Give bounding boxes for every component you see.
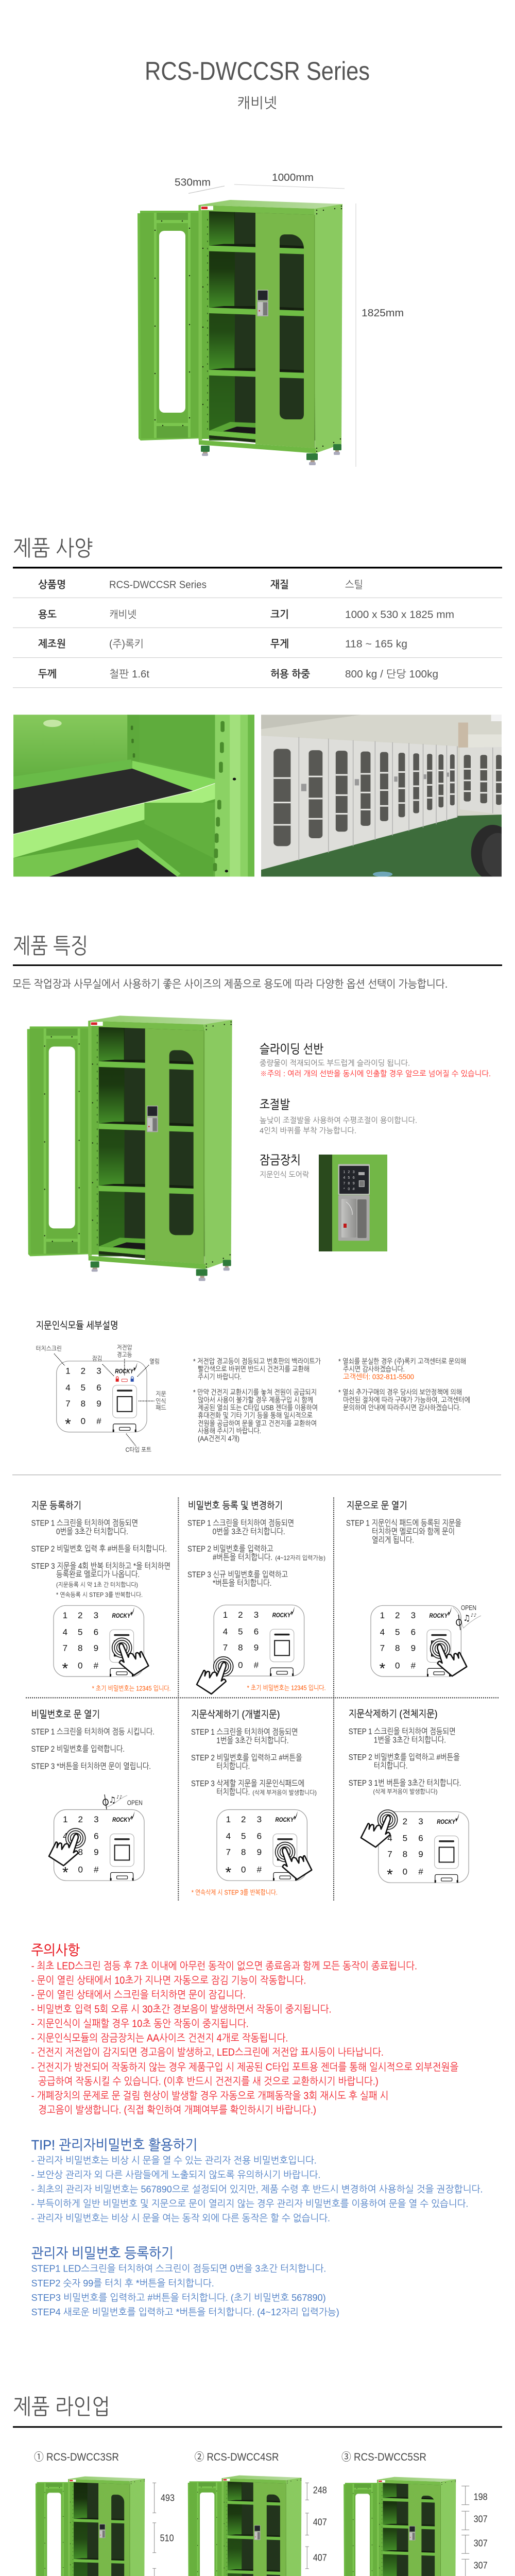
- diagram: fingerprint module: 잠김: [92, 1355, 102, 1362]
- step panel: delete all fingerprints: 1번을 3초간 터치합니다.: [374, 1736, 446, 1745]
- feature: sliding shelf: 슬라이딩 선반: [260, 1042, 323, 1056]
- cautions: 공급하여 작동시킬 수 있습니다. (이후 반드시 건전지를 새 것으로 교환하시기 바랍니다.): [38, 2076, 379, 2087]
- shelf dimensions: 307: [474, 2538, 488, 2548]
- icon: hand touching key: [49, 1828, 85, 1866]
- icon: melody notes with OPEN: OPEN: [461, 1604, 476, 1612]
- keypad: *: [65, 1416, 71, 1433]
- step panel: delete single fingerprint: STEP 1 스크린을 터치하여 점등되면: [191, 1727, 298, 1737]
- keypad: [217, 1809, 307, 1882]
- spec table: 철판 1.6t: [109, 669, 149, 680]
- step panel: register fingerprint: 등록완료 멜로디가 나옵니다.: [56, 1570, 140, 1579]
- feature: lock: [260, 1154, 387, 1251]
- step panel: delete all fingerprints: STEP 1 스크린을 터치하여 점등되면: [349, 1727, 456, 1736]
- keypad: 123: [65, 1366, 101, 1376]
- step panel: delete single fingerprint: STEP 3 삭제할 지문을 지문인식패드에: [191, 1779, 304, 1788]
- icon: hand touching pad: [276, 1842, 312, 1879]
- cautions: 경고음이 발생합니다. (직접 확인하여 개폐여부를 확인하시기 바랍니다.): [38, 2105, 316, 2116]
- step panel: register fingerprint: * 초기 비밀번호는 12345 입니다.: [92, 1685, 171, 1692]
- step panel: delete all fingerprints: STEP 3 1번 버튼을 3초간 터치합니다.: [349, 1778, 461, 1788]
- photo: cabinets installed in a room: [261, 715, 502, 877]
- keypad: 789: [223, 1642, 259, 1652]
- depth dimension: 530mm: [175, 177, 211, 189]
- notes: battery: 제공된 열쇠 또는 C타입 USB 젠더를 이용하여: [198, 1403, 318, 1412]
- diagram: fingerprint module: 지문: [156, 1391, 166, 1398]
- icon: hand touching pad: [112, 1638, 148, 1675]
- step panel: delete single fingerprint: STEP 2 비밀번호를 입력하고 #버튼을: [191, 1753, 302, 1762]
- spec table: 캐비넷: [109, 609, 136, 620]
- keypad: 456: [223, 1626, 259, 1636]
- diagram: fingerprint module: 패드: [156, 1404, 166, 1412]
- step panel: delete all fingerprints: [349, 1709, 469, 1884]
- step panel: register fingerprint: (지문등록 시 약 1초 간 터치합니다): [56, 1581, 138, 1588]
- step panel: delete single fingerprint: 터치합니다.: [216, 1788, 250, 1797]
- keypad: [54, 1605, 144, 1677]
- step panel: register password: *버튼을 터치합니다.: [213, 1579, 271, 1588]
- step panel: delete all fingerprints: STEP 2 비밀번호를 입력하고 #버튼을: [349, 1753, 460, 1762]
- feature: sliding shelf: 중량물이 적재되어도 부드럽게 슬라이딩 됩니다.: [260, 1059, 410, 1067]
- step panel: open with password: STEP 1 스크린을 터치하여 점등 시킵니다.: [31, 1727, 154, 1736]
- lock close-up image: 789: [343, 1182, 355, 1185]
- keypad: [214, 1605, 304, 1676]
- diagram: fingerprint module: [36, 1344, 166, 1453]
- spec table: [13, 579, 502, 688]
- tip: admin password: - 최초의 관리자 비밀번호는 567890으로 설정되어 있지만, 제품 수령 후 반드시 변경하여 사용하실 것을 권장합니다.: [31, 2184, 483, 2195]
- cautions: - 문이 열린 상태에서 10초가 지나면 자동으로 잠김 기능이 작동합니다.: [31, 1975, 306, 1986]
- feature: lock: 잠금장치: [260, 1154, 301, 1167]
- icon: melody notes with OPEN: ♫: [109, 1795, 116, 1805]
- keypad: ROCKY: [275, 1816, 294, 1823]
- notes: battery: 주시기 바랍니다.: [198, 1372, 242, 1381]
- section heading: product features: 제품 특징: [13, 934, 88, 958]
- icon: hand touching key 1: [361, 1810, 398, 1847]
- keypad: 123: [387, 1817, 423, 1826]
- keypad: [54, 1809, 144, 1882]
- step panel: delete single fingerprint: (삭제 부저음이 발생합니다): [252, 1789, 317, 1796]
- cautions: - 건전지 저전압이 감지되면 경고음이 발생하고, LED스크린에 저전압 표시등이 나타납니다.: [31, 2047, 384, 2058]
- notes: keys: 마련된 절차에 따라 구매가 가능하여, 고객센터에: [343, 1396, 470, 1404]
- keypad: 789: [226, 1848, 262, 1857]
- shelf dimensions: 407: [313, 2552, 327, 2563]
- step panel: register password: 비밀번호 등록 및 변경하기: [188, 1501, 283, 1512]
- cautions: - 비밀번호 입력 5회 오류 시 30초간 경보음이 발생하면서 작동이 중지됩니다.: [31, 2004, 332, 2015]
- keypad: 0#: [78, 1865, 99, 1874]
- feature: adjustable foot: 조절발: [260, 1098, 290, 1112]
- cautions: - 지문인식이 실패할 경우 10초 동안 작동이 중지됩니다.: [31, 2018, 249, 2029]
- step panel: register fingerprint: [31, 1501, 171, 1692]
- lock close-up image: [319, 1155, 387, 1251]
- cautions: [31, 1943, 458, 2116]
- admin password registration steps: [31, 2246, 339, 2317]
- keypad: 0#: [241, 1865, 262, 1874]
- keypad: 0#: [238, 1660, 259, 1670]
- spec table: (주)록키: [109, 639, 144, 650]
- lineup: RCS-DWCC4SR: [188, 2451, 327, 2576]
- tip: admin password: - 관리자 비밀번호는 비상 시 문을 열 수 있는 관리자 전용 비밀번호입니다.: [31, 2155, 317, 2166]
- notes: battery: 전원을 공급하여 문을 열고 건전지를 교환하여: [198, 1419, 317, 1427]
- diagram: fingerprint module: 열림: [149, 1358, 160, 1365]
- feature: sliding shelf: ※주의 : 여러 개의 선반을 동시에 인출할 경우 앞으로 넘어질 수 있습니다.: [260, 1070, 491, 1078]
- shelf dimensions: 307: [474, 2561, 488, 2571]
- step panel: register password: 0번을 3초간 터치합니다.: [213, 1527, 285, 1536]
- tip: admin password: TIP! 관리자비밀번호 활용하기: [31, 2137, 197, 2153]
- step panel: delete single fingerprint: 터치합니다.: [216, 1762, 250, 1771]
- keypad: 789: [63, 1848, 99, 1857]
- notes: battery: 휴대전화 및 기타 기기 등을 통해 일시적으로: [198, 1411, 313, 1419]
- diagram: fingerprint module: C타입 포트: [126, 1446, 151, 1453]
- keypad: [379, 1811, 469, 1884]
- step panel: delete single fingerprint: [191, 1709, 317, 1896]
- icon: melody notes with OPEN: ♪♪: [116, 1795, 123, 1800]
- title: [145, 57, 370, 111]
- keypad: 123: [226, 1815, 262, 1824]
- shelf dimensions: 198: [474, 2492, 488, 2502]
- icon: melody notes with OPEN: OPEN: [127, 1799, 143, 1807]
- spec table: 제조원: [38, 639, 66, 650]
- heading: fingerprint module details: 지문인식모듈 세부설명: [36, 1320, 118, 1331]
- step panel: register fingerprint: STEP 1 스크린을 터치하여 점등되면: [31, 1519, 138, 1528]
- notes: keys: 문의하여 안내에 따라주시면 감사하겠습니다.: [343, 1403, 461, 1412]
- step panel: delete single fingerprint: * 연속삭제 시 STEP 3를 반복합니다.: [192, 1889, 278, 1896]
- keypad: 0#: [395, 1660, 416, 1670]
- notes: keys: 주시면 감사하겠습니다.: [343, 1365, 405, 1373]
- tip: admin password: - 보안상 관리자 외 다른 사람들에게 노출되지 않도록 유의하시기 바랍니다.: [31, 2170, 320, 2180]
- lineup: RCS-DWCC5SR: [341, 2451, 488, 2576]
- step panel: delete single fingerprint: 지문삭제하기 (개별지문): [191, 1709, 280, 1720]
- keypad: 456: [387, 1833, 423, 1843]
- shelf dimensions: 307: [474, 2514, 488, 2524]
- width dimension: 1000mm: [272, 172, 314, 183]
- keypad: ROCKY: [112, 1816, 131, 1823]
- step panel: open with fingerprint: 지문으로 문 열기: [347, 1501, 407, 1512]
- step panel: register password: STEP 1 스크린을 터치하여 점등되면: [187, 1519, 294, 1528]
- notes: keys: * 열쇠 추가구매의 경우 당사의 보안정책에 의해: [338, 1388, 462, 1396]
- step panel: register fingerprint: 지문 등록하기: [31, 1501, 81, 1512]
- notes: battery: 않아서 사용이 불가할 경우 제품구입 시 함께: [198, 1396, 313, 1404]
- step panel: register fingerprint: STEP 2 비밀번호 입력 후 #버튼을 터치합니다.: [31, 1545, 167, 1554]
- keypad: ROCKY: [437, 1818, 456, 1825]
- diagram: fingerprint module: 경고등: [117, 1351, 132, 1359]
- diagram: fingerprint module: 저전압: [117, 1344, 132, 1351]
- keypad: 0#: [403, 1867, 423, 1876]
- lineup: RCS-DWCC3SR: ① RCS-DWCC3SR: [34, 2451, 119, 2463]
- keypad: [57, 1361, 147, 1433]
- photo: shelf close-up: [13, 715, 254, 877]
- admin password registration steps: 관리자 비밀번호 등록하기: [31, 2246, 174, 2261]
- admin password registration steps: STEP2 숫자 99를 터치 후 *버튼을 터치합니다.: [31, 2278, 214, 2289]
- admin password registration steps: STEP1 LED스크린을 터치하여 스크린이 점등되면 0번을 3초간 터치합니다.: [31, 2263, 326, 2274]
- step panel: register password: * 초기 비밀번호는 12345 입니다.: [247, 1684, 326, 1692]
- keypad: 789: [387, 1850, 423, 1859]
- cabinet: [187, 2475, 302, 2576]
- step panel: open with fingerprint: 열리게 됩니다.: [372, 1535, 414, 1545]
- keypad: ROCKY: [430, 1612, 448, 1619]
- spec table: 스틸: [345, 579, 363, 590]
- admin password registration steps: STEP3 비밀번호를 입력하고 #버튼을 터치합니다. (초기 비밀번호 567890): [31, 2292, 326, 2303]
- notes: battery: * 만약 건전지 교환시기를 놓쳐 전원이 공급되지: [193, 1388, 317, 1396]
- keypad: 456: [65, 1383, 101, 1393]
- step panel: register fingerprint: STEP 3 지문을 4회 반복 터치하고 *을 터치하면: [31, 1562, 170, 1571]
- lineup: RCS-DWCC5SR: ③ RCS-DWCC5SR: [341, 2451, 426, 2463]
- step panel: delete single fingerprint: 1번을 3초간 터치합니다.: [216, 1736, 289, 1745]
- shelf dimensions: [305, 2483, 327, 2576]
- cabinet: [344, 2477, 456, 2576]
- spec table: 재질: [270, 579, 289, 590]
- step panel: open with fingerprint: 터치하면 멜로디와 함께 문이: [372, 1527, 455, 1536]
- step panel: register password: STEP 3 신규 비밀번호를 입력하고: [187, 1570, 288, 1580]
- keypad: *: [222, 1659, 229, 1676]
- spec table: 무게: [270, 639, 289, 650]
- step panel: open with password: [31, 1709, 154, 1882]
- step panel: open with fingerprint: STEP 1 지문인식 패드에 등록된 지문을: [346, 1519, 461, 1528]
- spec table: 용도: [38, 609, 57, 620]
- section heading: product spec: [13, 536, 502, 569]
- keypad: 456: [380, 1627, 416, 1637]
- notes: battery: 사용해 주시기 바랍니다.: [198, 1427, 261, 1435]
- step panel: open with password: STEP 2 비밀번호를 입력합니다.: [31, 1744, 125, 1754]
- diagram: fingerprint module: 인식: [156, 1397, 166, 1404]
- cautions: - 지문인식모듈의 잠금장치는 AA사이즈 건전지 4개로 작동됩니다.: [31, 2033, 288, 2044]
- cabinet: [35, 2476, 145, 2576]
- spec table: 크기: [270, 609, 289, 620]
- tip: admin password: - 관리자 비밀번호는 비상 시 문을 여는 동작 외에 다른 동작은 할 수 없습니다.: [31, 2213, 330, 2224]
- shelf dimensions: 248: [313, 2485, 327, 2496]
- feature: sliding shelf: [260, 1042, 491, 1078]
- subtitle: 캐비넷: [237, 95, 277, 111]
- spec table: 두께: [38, 669, 57, 680]
- keypad: *: [62, 1660, 68, 1677]
- lineup: RCS-DWCC3SR: [34, 2451, 175, 2576]
- spec table: 허용 하중: [270, 669, 310, 680]
- title: RCS-DWCCSR Series: [145, 57, 370, 86]
- icon: melody notes with OPEN: ♪♪: [471, 1613, 477, 1618]
- step panel: delete all fingerprints: 지문삭제하기 (전체지문): [349, 1709, 438, 1720]
- lock close-up image: *0#: [344, 1188, 355, 1191]
- step panel: register password: #버튼을 터치합니다.: [213, 1553, 272, 1562]
- depth dimension: [175, 177, 225, 193]
- feature: adjustable foot: 높낮이 조절발을 사용하여 수평조절이 용이합니다.: [260, 1116, 417, 1125]
- cautions: 주의사항: [31, 1943, 80, 1958]
- spec table: 118 ~ 165 kg: [345, 639, 407, 650]
- feature: lock: 지문인식 도어락: [260, 1171, 310, 1179]
- shelf dimensions: 510: [160, 2533, 174, 2544]
- step panel: register password: STEP 2 비밀번호를 입력하고: [187, 1545, 273, 1554]
- keypad: 123: [63, 1611, 98, 1620]
- feature: adjustable foot: [260, 1098, 417, 1136]
- step panel: register fingerprint: * 연속등록 시 STEP 3를 반복합니다.: [56, 1591, 143, 1598]
- keypad: *: [387, 1866, 393, 1884]
- feature cabinet illustration: [27, 1015, 232, 1281]
- keypad: [371, 1605, 461, 1677]
- section heading: product spec: 제품 사양: [13, 536, 93, 561]
- intro sentence: 모든 작업장과 사무실에서 사용하기 좋은 사이즈의 제품으로 용도에 따라 다양한 옵션 선택이 가능합니다.: [12, 978, 448, 990]
- keypad: *: [379, 1660, 385, 1677]
- keypad: 456: [63, 1627, 98, 1637]
- admin password registration steps: STEP4 새로운 비밀번호를 입력하고 *버튼을 터치합니다. (4~12자리 입력가능): [31, 2307, 339, 2317]
- keypad: ROCKY: [272, 1612, 291, 1619]
- keypad: ROCKY: [115, 1367, 134, 1375]
- notes: battery: 빨간색으로 바뀌면 반드시 건전지를 교환해: [198, 1365, 310, 1373]
- width dimension: [234, 172, 345, 189]
- notes: keys: * 열쇠를 분실한 경우 (주)록키 고객센터로 문의해: [338, 1357, 466, 1365]
- diagram: fingerprint module: 터치스크린: [36, 1345, 62, 1352]
- step panel: delete all fingerprints: 터치합니다.: [374, 1761, 408, 1771]
- icon: hand touching pad: [431, 1639, 467, 1676]
- tip: admin password: [31, 2137, 483, 2224]
- keypad: 0#: [81, 1416, 101, 1426]
- keypad: 123: [223, 1610, 259, 1620]
- keypad: *: [62, 1864, 68, 1882]
- cautions: - 문이 열린 상태에서 스크린을 터치하면 문이 잠깁니다.: [31, 1990, 246, 2001]
- cautions: - 개폐장치의 문제로 문 걸림 현상이 발생할 경우 자동으로 개폐동작을 3회 재시도 후 실패 시: [31, 2091, 389, 2102]
- step panel: delete all fingerprints: (삭제 부저음이 발생합니다): [373, 1788, 438, 1795]
- feature: adjustable foot: 4인치 바퀴를 부착 가능합니다.: [260, 1126, 356, 1136]
- hero cabinet with dimensions: [138, 172, 404, 467]
- step panel: register password: [187, 1501, 326, 1694]
- cautions: - 최초 LED스크린 점등 후 7초 이내에 아무런 동작이 없으면 종료음과 함께 모든 동작이 종료됩니다.: [31, 1960, 417, 1972]
- keypad: 789: [63, 1643, 98, 1653]
- lock close-up image: 123: [343, 1171, 355, 1174]
- shelf dimensions: 407: [313, 2517, 327, 2528]
- section heading: product lineup: 제품 라인업: [13, 2395, 110, 2419]
- spec table: RCS-DWCCSR Series: [109, 579, 207, 590]
- keypad: 456: [226, 1831, 262, 1841]
- keypad: 123: [63, 1815, 99, 1824]
- notes: battery: (AA건전지 4개): [198, 1434, 239, 1443]
- section heading: product features: [13, 934, 502, 966]
- step panel: register fingerprint: 0번을 3초간 터치합니다.: [56, 1527, 128, 1536]
- step panel: register password: (4~12자리 입력가능): [275, 1554, 325, 1562]
- spec table: 800 kg / 단당 100kg: [345, 669, 438, 680]
- keypad: 456: [63, 1831, 99, 1841]
- icon: melody notes with OPEN: [103, 1794, 143, 1809]
- shelf dimensions: [461, 2486, 488, 2576]
- spec table: 1000 x 530 x 1825 mm: [345, 609, 454, 620]
- shelf dimensions: [152, 2483, 175, 2576]
- lineup: RCS-DWCC4SR: ② RCS-DWCC4SR: [195, 2451, 279, 2463]
- keypad: ROCKY: [112, 1612, 131, 1619]
- notes: battery: [193, 1357, 321, 1443]
- lock close-up image: 456: [343, 1176, 355, 1180]
- spec table: 상품명: [38, 579, 66, 590]
- keypad: 789: [380, 1643, 416, 1653]
- notes: keys: [338, 1357, 470, 1412]
- keypad: 0#: [78, 1660, 99, 1670]
- keypad: *: [225, 1864, 231, 1882]
- keypad: 789: [65, 1399, 101, 1409]
- tip: admin password: - 부득이하게 일반 비밀번호 및 지문으로 문이 열리지 않는 경우 관리자 비밀번호를 이용하여 문을 열 수 있습니다.: [31, 2198, 468, 2209]
- icon: melody notes with OPEN: ♫: [463, 1613, 470, 1623]
- step panel: open with password: STEP 3 *버튼을 터치하면 문이 열립니다.: [31, 1762, 151, 1771]
- step panel: open with fingerprint: [346, 1501, 481, 1677]
- notes: battery: * 저전압 경고등이 점등되고 번호판의 백라이트가: [193, 1357, 321, 1365]
- notes: keys: 고객센터: 032-811-5500: [343, 1372, 414, 1381]
- icon: melody notes with OPEN: [453, 1604, 481, 1630]
- cabinet illustration: [138, 200, 342, 465]
- height dimension: 1825mm: [362, 308, 404, 319]
- section heading: product lineup: [13, 2395, 502, 2428]
- step panel: open with password: 비밀번호로 문 열기: [31, 1709, 100, 1720]
- icon: hand touching star key: [197, 1657, 233, 1694]
- shelf dimensions: 493: [161, 2493, 175, 2503]
- keypad: 123: [380, 1611, 416, 1620]
- cautions: - 건전지가 방전되어 작동하지 않는 경우 제품구입 시 제공된 C타입 포트용 젠더를 통해 일시적으로 외부전원을: [31, 2062, 458, 2073]
